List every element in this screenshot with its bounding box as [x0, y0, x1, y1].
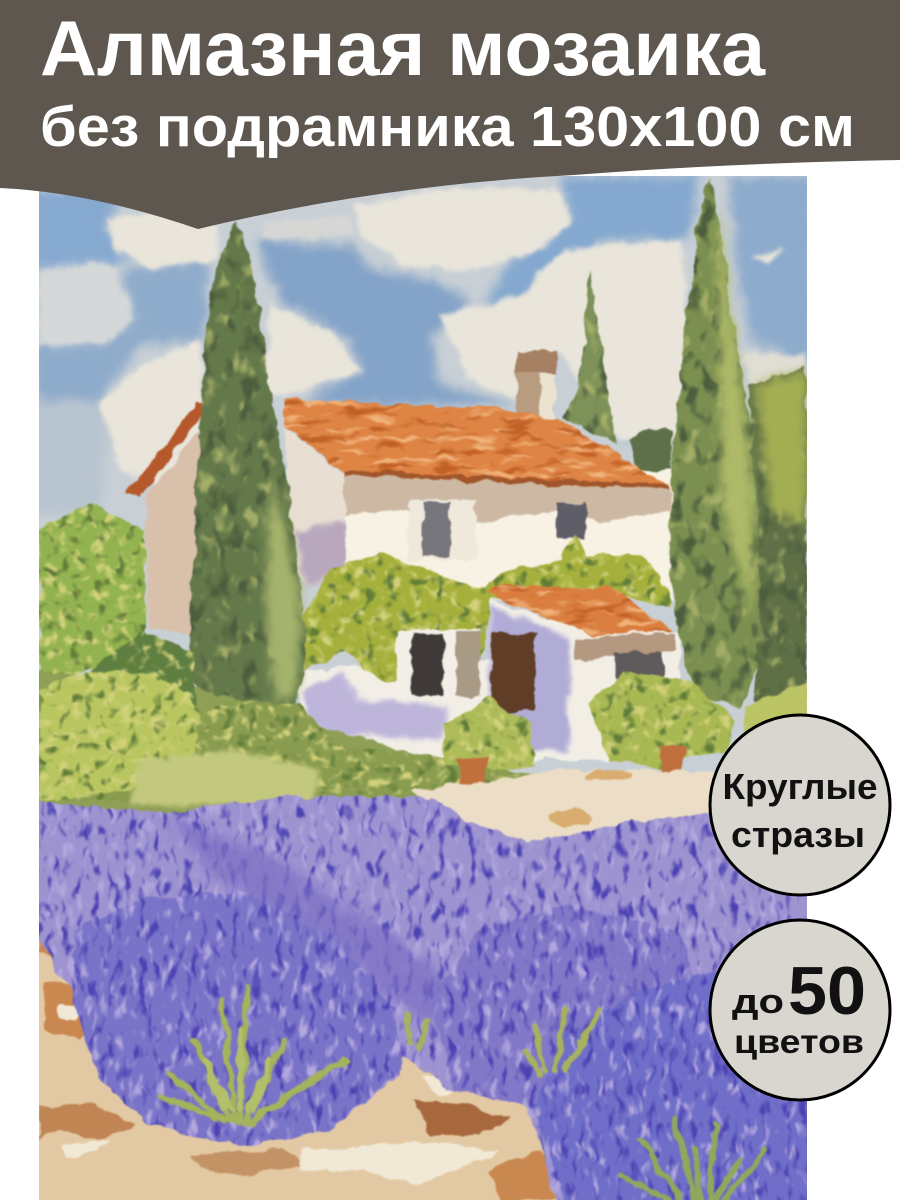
top banner — [0, 0, 900, 229]
badge: up to 50 colours — [710, 920, 890, 1100]
right cypress — [670, 176, 761, 708]
ground pale patches — [60, 1005, 500, 1185]
badge: round rhinestones: стразы — [731, 814, 865, 855]
badge: round rhinestones: Круглые — [722, 766, 878, 807]
light lower bush — [130, 750, 320, 805]
main roof — [285, 398, 670, 487]
ground terracotta patches — [39, 932, 570, 1200]
lower window — [396, 630, 480, 698]
house — [127, 350, 680, 760]
ground — [39, 938, 558, 1200]
main front wall — [345, 470, 672, 600]
back lavender rows — [30, 797, 815, 1200]
sky — [30, 176, 815, 515]
middle wall — [285, 428, 347, 585]
painting: Provençal house and lavender field — [20, 160, 820, 1200]
upper window — [407, 500, 476, 560]
far right shrub — [745, 682, 807, 735]
row shadow — [160, 815, 480, 1020]
distant small cypress — [562, 270, 617, 445]
porch window — [615, 651, 663, 679]
front right lavender bush — [535, 960, 815, 1200]
terracotta pots — [456, 745, 686, 788]
path patches — [548, 770, 635, 826]
badge: up to 50 colours: цветов — [734, 1023, 864, 1060]
badge: round rhinestones — [710, 715, 890, 895]
potted shrub right — [588, 672, 735, 770]
garden path — [410, 768, 714, 843]
badge: up to 50 colours: до — [732, 983, 784, 1021]
lavender field — [30, 797, 815, 1200]
lilac wall shadows — [305, 672, 450, 740]
chimney — [516, 350, 557, 426]
garden shrubs — [30, 632, 807, 815]
lavender stems — [160, 985, 765, 1200]
middle lavender bush — [430, 905, 700, 1107]
porch roof — [485, 585, 673, 637]
light bush left — [39, 670, 200, 800]
gable roof edge — [127, 403, 208, 497]
title: Алмазная мозаика — [40, 4, 766, 92]
right upper window — [556, 504, 586, 538]
subtitle: без подрамника 130х100 см — [40, 95, 855, 159]
front left lavender bush — [70, 890, 402, 1147]
dark shrub — [90, 632, 197, 708]
potted shrub centre — [442, 697, 535, 770]
ivy on wall — [302, 535, 669, 695]
low hedge — [39, 700, 560, 800]
left cypress — [190, 222, 305, 735]
left background trees — [39, 503, 145, 680]
roof eave — [345, 470, 670, 490]
right background trees — [630, 368, 807, 700]
left wall — [145, 425, 205, 640]
door — [492, 634, 535, 712]
porch wall — [300, 600, 680, 760]
foliage underlayer — [39, 670, 417, 814]
badge: up to 50 colours: 50 — [788, 953, 866, 1029]
